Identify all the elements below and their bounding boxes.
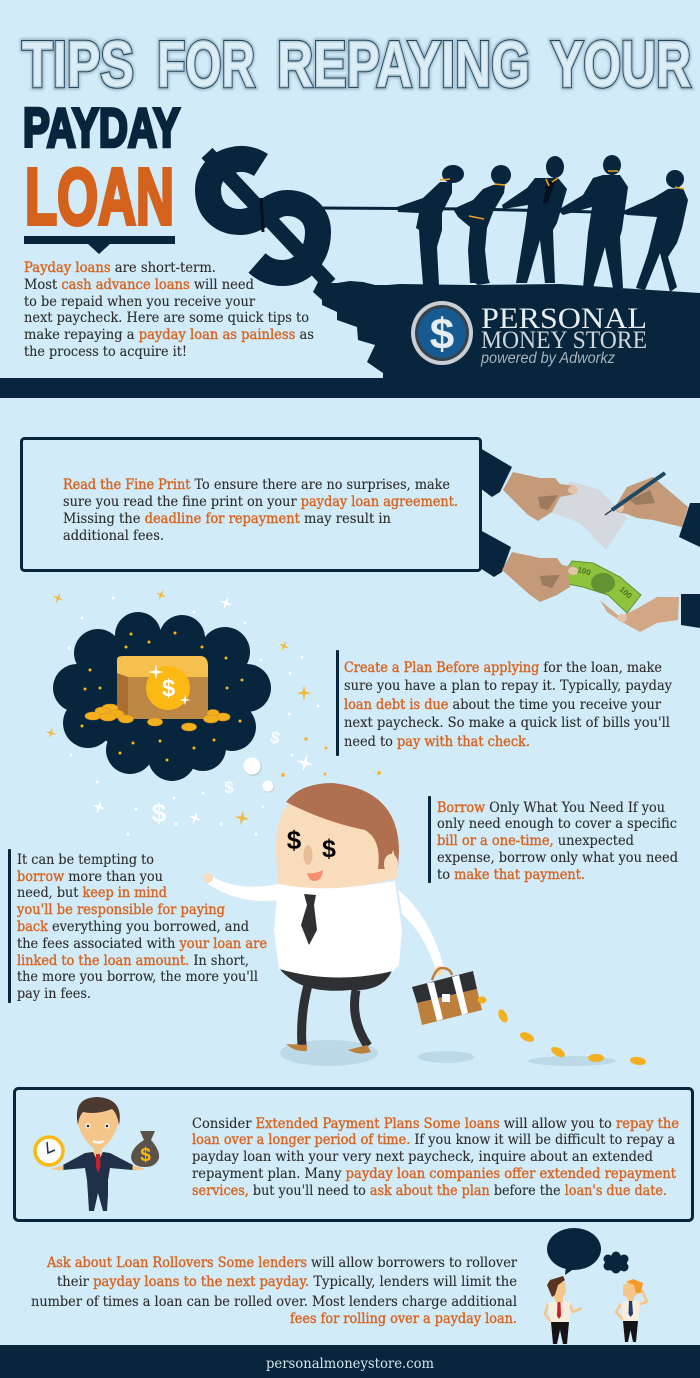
logo: personal money store: PERSONAL	[481, 302, 647, 335]
title: REPAYING	[277, 28, 530, 100]
text block: borrow only what you need: bill or a one-time, unexpected	[437, 833, 634, 849]
panel: extended payment plans	[14, 1088, 692, 1220]
text block: create a plan	[336, 650, 672, 756]
thought bubble dots and sparkles: $	[224, 778, 234, 797]
text block: ask about loan rollovers: fees for rolling over a payday loan.	[290, 1311, 517, 1327]
logo: personal money store: MONEY STORE	[481, 327, 647, 354]
text block: ask about loan rollovers: number of times a loan can be rolled over. Most lenders charge additional	[31, 1294, 517, 1310]
footer band	[0, 1345, 700, 1378]
icon: hands with contract and pen	[480, 448, 700, 550]
text block: tempting to borrow: borrow more than you	[17, 869, 163, 885]
illustration: man weighing time and money: $	[140, 1145, 151, 1166]
panel: read the fine print	[22, 438, 480, 570]
silhouettes: tug of war team	[397, 155, 688, 292]
footer band: personalmoneystore.com	[266, 1356, 434, 1372]
heading: payday loan	[23, 96, 180, 254]
illustration: businessman with dollar eyes: $	[287, 825, 302, 855]
panel: extended payment plans: payday loan with your very next paycheck, inquire about an extended	[192, 1149, 653, 1165]
text block: borrow only what you need	[428, 796, 678, 883]
text block: tempting to borrow: linked to the loan amount. In short,	[17, 953, 249, 969]
text block: tempting to borrow	[8, 849, 267, 1003]
logo: personal money store	[411, 301, 647, 367]
title: TIPS	[22, 28, 134, 100]
thought cloud with treasure chest: $	[162, 675, 176, 702]
panel: extended payment plans: repayment plan. Many payday loan companies offer extended repayment	[192, 1166, 676, 1182]
heading: payday loan: PAYDAY	[23, 96, 180, 158]
trail of coins	[478, 996, 646, 1066]
icon: hands exchanging cash	[480, 530, 700, 632]
text block: borrow only what you need: only need enough to cover a specific	[437, 816, 677, 832]
intro text: Payday loans are short-term.	[24, 260, 216, 276]
text block: create a plan: loan debt is due about the time you receive your	[344, 697, 661, 713]
panel: read the fine print: Missing the deadline for repayment may result in	[63, 511, 391, 527]
text block: create a plan: sure you have a plan to repay it. Typically, payday	[344, 678, 672, 694]
logo: personal money store: $	[430, 310, 454, 359]
text block: create a plan: Create a Plan Before applying for the loan, make	[344, 660, 662, 676]
text block: borrow only what you need: Borrow Only What You Need If you	[437, 800, 665, 816]
title: REPAYING	[277, 28, 530, 100]
text block: ask about loan rollovers: Ask about Loan Rollovers Some lenders will allow borrowers to rollover	[46, 1255, 517, 1271]
title: FOR	[157, 28, 255, 100]
intro text: Most cash advance loans will need	[24, 277, 254, 293]
intro text: make repaying a payday loan as painless as	[24, 327, 314, 343]
text block: tempting to borrow: It can be tempting to	[17, 852, 154, 868]
text block: tempting to borrow: you'll be responsible for paying	[16, 902, 225, 918]
title: TIPS	[22, 28, 134, 100]
panel: read the fine print: additional fees.	[63, 528, 164, 544]
rope	[320, 208, 660, 214]
text block: ask about loan rollovers: their payday loans to the next payday. Typically, lenders will limit the	[57, 1274, 517, 1290]
title: FOR	[157, 28, 255, 100]
panel: extended payment plans: services, but you'll need to ask about the plan before the loan's due date.	[192, 1183, 667, 1199]
text block: ask about loan rollovers	[31, 1255, 517, 1327]
thought bubble dots and sparkles	[44, 588, 381, 836]
title	[22, 28, 691, 100]
icon: hands exchanging cash: 100	[618, 585, 634, 601]
thought bubble dots and sparkles: $	[268, 727, 282, 748]
cliff and band	[0, 281, 700, 398]
logo: personal money store: powered by Adworkz	[480, 350, 615, 367]
icon: hands exchanging cash: 100	[576, 565, 592, 578]
illustration: businessman with dollar eyes: $	[322, 835, 336, 863]
text block: tempting to borrow: need, but keep in mind	[17, 885, 167, 901]
panel: read the fine print: Read the Fine Print To ensure there are no surprises, make	[63, 477, 450, 493]
text block: tempting to borrow: pay in fees.	[17, 986, 91, 1002]
panel: extended payment plans: Consider Extended Payment Plans Some loans will allow you to repay the	[192, 1116, 679, 1132]
heading: payday loan: LOAN	[25, 152, 174, 241]
intro text	[24, 260, 314, 360]
text block: tempting to borrow: back everything you borrowed, and	[17, 919, 249, 935]
intro text: to be repaid when you receive your	[24, 294, 255, 310]
title: TIPS	[22, 28, 134, 100]
icon: tilted dollar sign	[207, 153, 330, 284]
intro text: next paycheck. Here are some quick tips to	[24, 310, 309, 326]
illustration: two men talking	[545, 1276, 647, 1344]
illustration: man weighing time and money	[35, 1097, 159, 1211]
panel: extended payment plans: loan over a longer period of time. If you know it will be difficult to repay a	[192, 1132, 675, 1148]
intro text: the process to acquire it!	[24, 344, 187, 360]
title: FOR	[157, 28, 255, 100]
text block: create a plan: next paycheck. So make a quick list of bills you'll	[344, 715, 670, 731]
icon: speech bubbles	[547, 1228, 628, 1275]
thought cloud with treasure chest	[53, 612, 271, 781]
text block: create a plan: need to pay with that check.	[344, 734, 530, 750]
thought bubble dots and sparkles: $	[152, 798, 167, 828]
illustration: businessman with dollar eyes	[203, 783, 616, 1066]
text block: tempting to borrow: the more you borrow, the more you'll	[17, 969, 258, 985]
panel: read the fine print: sure you read the fine print on your payday loan agreement.	[63, 494, 458, 510]
text block: borrow only what you need: to make that payment.	[437, 867, 585, 883]
text block: tempting to borrow: the fees associated with your loan are	[17, 936, 267, 952]
text block: borrow only what you need: expense, borrow only what you need	[437, 850, 678, 866]
title: REPAYING	[277, 28, 530, 100]
